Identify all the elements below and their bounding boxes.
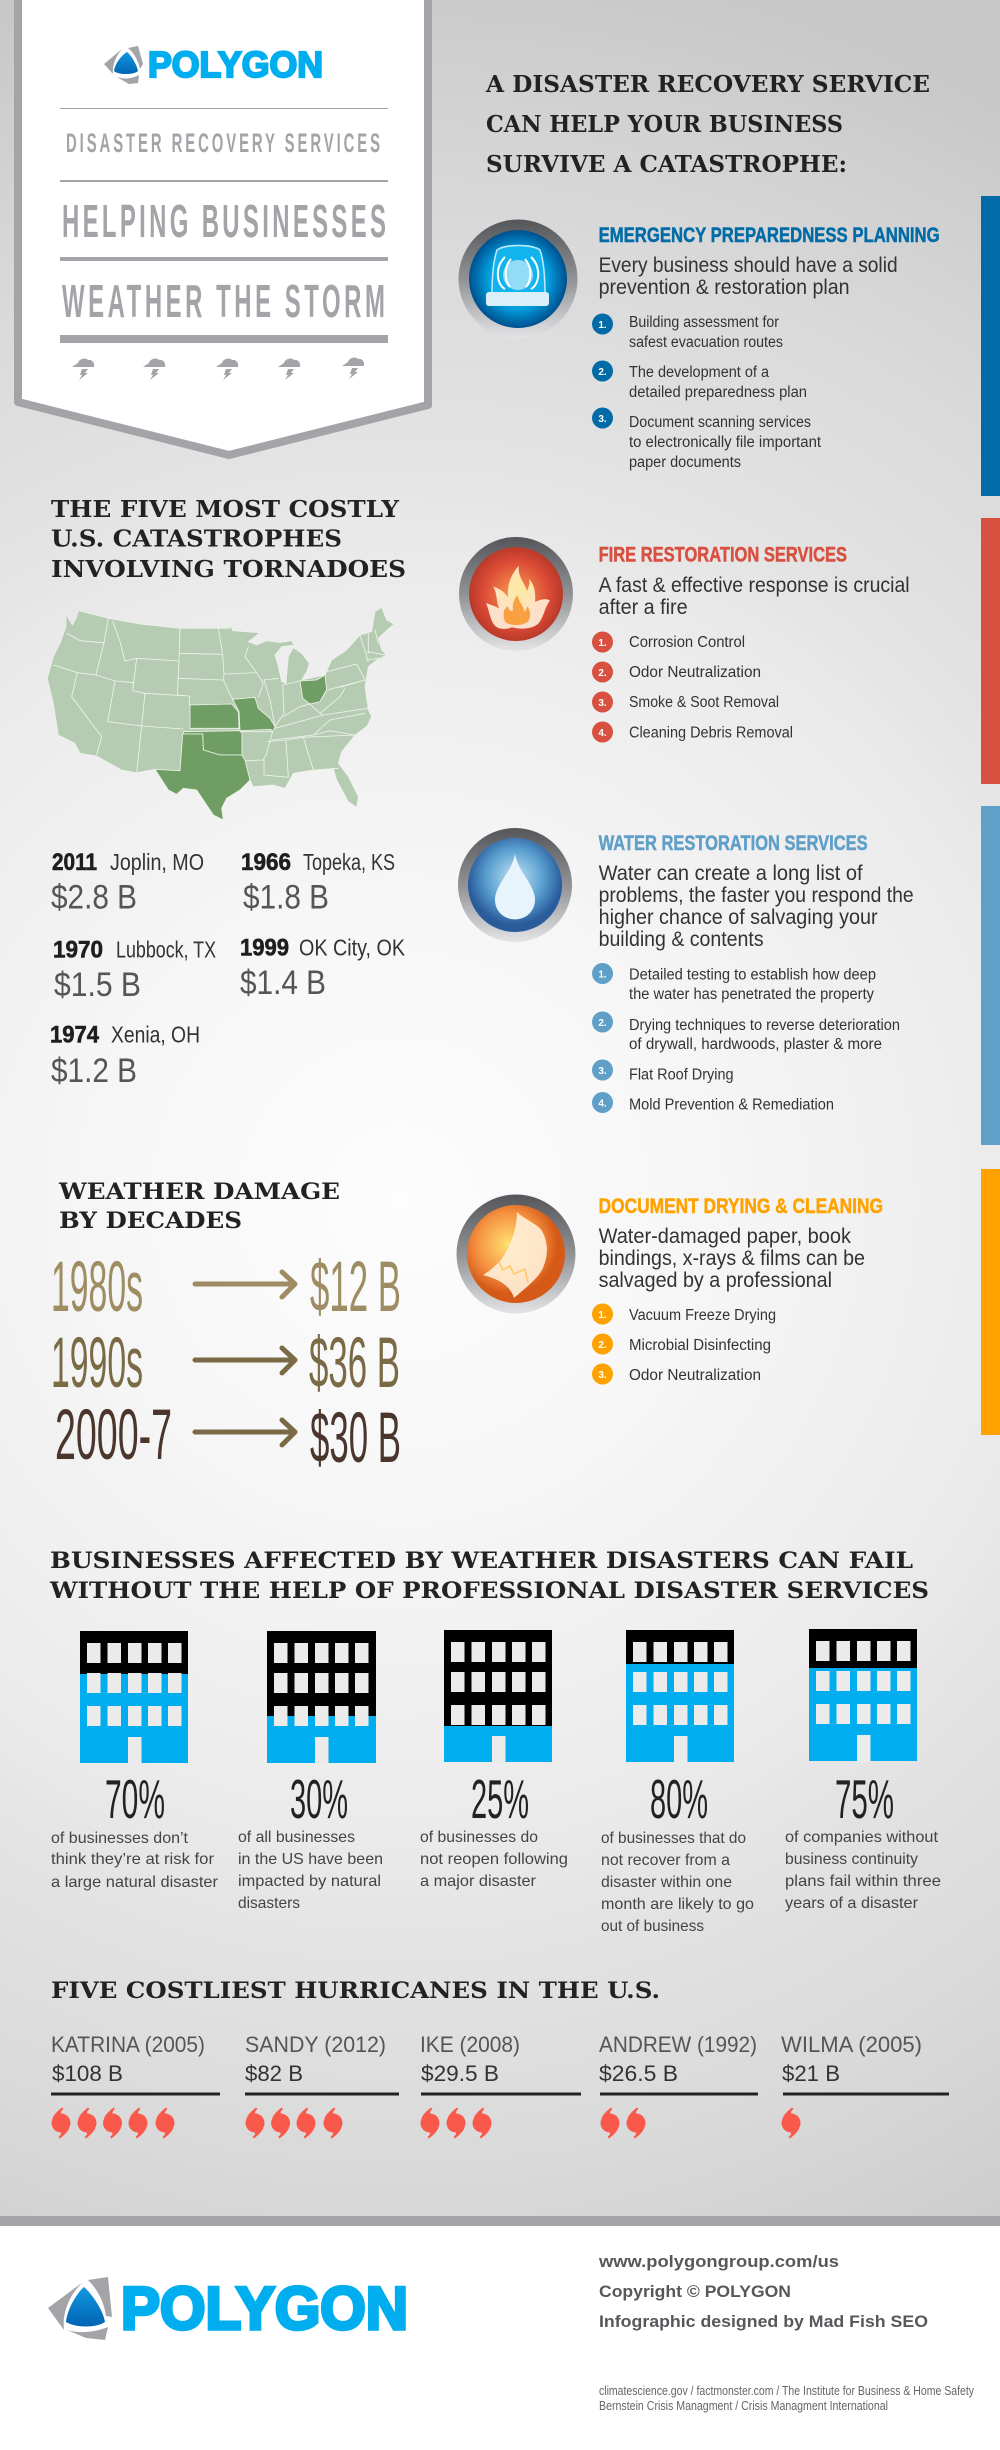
arrow: 1990s bbox=[195, 1348, 295, 1373]
list: 4. bbox=[598, 1098, 607, 1110]
hurricane: Andrew: ANDREW (1992) bbox=[599, 2032, 757, 2057]
list: 1. bbox=[598, 1310, 607, 1321]
stat: 80% bbox=[601, 1630, 754, 1935]
description: month are likely to go bbox=[601, 1896, 754, 1913]
heading: five most costly tornado catastrophes: INVOLVING TORNADOES bbox=[51, 556, 406, 583]
panel: footer bbox=[0, 2216, 1000, 2450]
description bbox=[599, 1225, 865, 1292]
hurricane: Sandy bbox=[245, 2032, 399, 2138]
hurricane: Katrina bbox=[51, 2032, 220, 2138]
chart: damage by decade bbox=[51, 1248, 401, 1478]
description: not reopen following bbox=[420, 1851, 568, 1868]
heading: five costliest hurricanes: FIVE COSTLIEST HURRICANES IN THE U.S. bbox=[51, 1978, 660, 2004]
description: Water can create a long list of bbox=[599, 862, 863, 885]
list: 2. bbox=[598, 1018, 607, 1029]
description bbox=[238, 1829, 383, 1912]
list: Odor Neutralization bbox=[629, 1367, 761, 1384]
list bbox=[592, 632, 793, 742]
description: higher chance of salvaging your bbox=[599, 906, 878, 929]
description: of companies without bbox=[785, 1829, 939, 1846]
stat: Lubbock: 1970 bbox=[53, 936, 103, 964]
row: 1980s: 1980s bbox=[51, 1248, 143, 1327]
list: Mold Prevention & Remediation bbox=[629, 1096, 834, 1114]
description: bindings, x-rays & films can be bbox=[599, 1247, 865, 1270]
heading: disaster recovery service: CAN HELP YOUR BUSINESS bbox=[486, 111, 843, 138]
heading: weather damage by decades bbox=[58, 1179, 340, 1234]
hurricane: Ike bbox=[420, 2032, 581, 2138]
list: 3. bbox=[598, 1066, 607, 1077]
stat: Topeka: $1.8 B bbox=[243, 879, 329, 917]
list: of drywall, hardwoods, plaster & more bbox=[629, 1036, 882, 1053]
stat: 75% bbox=[785, 1629, 941, 1912]
heading: disaster recovery service: A DISASTER RECOVERY SERVICE bbox=[485, 71, 930, 98]
description: not recover from a bbox=[601, 1852, 730, 1869]
stat: 70%: 70% bbox=[105, 1768, 165, 1830]
stat: Joplin: $2.8 B bbox=[51, 879, 137, 917]
heading: weather damage by decades: WEATHER DAMAGE bbox=[58, 1179, 340, 1205]
list: 4. bbox=[598, 728, 607, 739]
hurricane: Wilma: WILMA (2005) bbox=[781, 2032, 922, 2057]
list: 3. bbox=[598, 1370, 607, 1381]
description bbox=[599, 574, 910, 619]
icon: building 80% bbox=[626, 1630, 734, 1763]
list: to electronically file important bbox=[629, 434, 822, 451]
list: Building assessment for bbox=[629, 314, 779, 331]
list: Drying techniques to reverse deterioration bbox=[629, 1017, 900, 1034]
row: 2000-7: 2000-7 bbox=[55, 1396, 172, 1475]
description: of all businesses bbox=[238, 1829, 355, 1846]
heading: businesses affected bbox=[49, 1548, 929, 1604]
list: paper documents bbox=[629, 454, 741, 471]
stat: Xenia: 1974 bbox=[50, 1022, 100, 1048]
heading: disaster recovery service bbox=[485, 71, 930, 178]
description: of businesses do bbox=[420, 1829, 538, 1846]
list: Document scanning services bbox=[629, 414, 811, 431]
list: 2. bbox=[598, 367, 607, 378]
hurricane: Wilma bbox=[781, 2032, 949, 2138]
panel: water restoration bbox=[458, 806, 1000, 1145]
description bbox=[601, 1830, 754, 1935]
description bbox=[420, 1829, 568, 1890]
heading: DOCUMENT DRYING & CLEANING bbox=[599, 1195, 883, 1218]
footer credits bbox=[598, 2252, 928, 2331]
list: 2. bbox=[598, 668, 607, 679]
stat: Joplin: 2011 bbox=[52, 849, 97, 876]
description: business continuity bbox=[785, 1851, 918, 1868]
stat: OK City: OK City, OK bbox=[299, 934, 406, 960]
list: 3. bbox=[598, 698, 607, 709]
icon: building 25% bbox=[444, 1630, 552, 1763]
icons: storm clouds bbox=[72, 358, 364, 380]
description: A fast & effective response is crucial bbox=[599, 574, 910, 597]
text: $12 B bbox=[310, 1248, 401, 1327]
stat: Lubbock: $1.5 B bbox=[54, 966, 141, 1004]
description: prevention & restoration plan bbox=[599, 276, 850, 299]
arrow: 2000-7 bbox=[195, 1420, 295, 1445]
heading: FIRE RESTORATION SERVICES bbox=[599, 544, 847, 566]
list: 1. bbox=[598, 320, 607, 331]
list: the water has penetrated the property bbox=[629, 986, 874, 1003]
icon: flame bbox=[459, 537, 573, 651]
footer credits: www.polygongroup.com/us bbox=[598, 2252, 839, 2271]
list: 3. bbox=[598, 414, 607, 425]
description: problems, the faster you respond the bbox=[599, 884, 914, 907]
stat: Topeka: Topeka, KS bbox=[303, 849, 395, 875]
logo: Polygon large: POLYGON bbox=[121, 2275, 408, 2342]
banner shape bbox=[18, 0, 428, 455]
sources: Bernstein Crisis Managment / Crisis Managment International bbox=[599, 2399, 888, 2413]
hurricane: Andrew: $26.5 B bbox=[599, 2061, 678, 2086]
list: The development of a bbox=[629, 364, 769, 381]
description: of businesses that do bbox=[601, 1830, 746, 1847]
hurricane: Wilma: $21 B bbox=[782, 2061, 840, 2086]
stat: Xenia: Xenia, OH bbox=[111, 1022, 200, 1048]
hurricane: Ike: IKE (2008) bbox=[420, 2032, 520, 2057]
text: $30 B bbox=[310, 1399, 401, 1478]
sources bbox=[599, 2384, 975, 2413]
list: Vacuum Freeze Drying bbox=[629, 1307, 776, 1324]
icon: building 70% bbox=[80, 1631, 188, 1764]
heading: five most costly tornado catastrophes: THE FIVE MOST COSTLY bbox=[51, 496, 400, 523]
hurricane: Ike: $29.5 B bbox=[421, 2061, 499, 2086]
icons: two hurricane symbols bbox=[600, 2108, 646, 2138]
description: disasters bbox=[238, 1895, 300, 1912]
heading: five most costly tornado catastrophes bbox=[51, 496, 406, 583]
stat: 25%: 25% bbox=[471, 1768, 529, 1830]
panel: document drying bbox=[456, 1169, 1000, 1435]
subtitle: DISASTER RECOVERY SERVICES bbox=[66, 127, 380, 158]
heading: disaster recovery service: SURVIVE A CATASTROPHE: bbox=[486, 151, 847, 178]
panel: emergency preparedness bbox=[458, 196, 1000, 496]
description: a major disaster bbox=[420, 1873, 537, 1890]
row: 2000-7 bbox=[55, 1396, 401, 1478]
hurricane: Andrew bbox=[599, 2032, 758, 2138]
description: salvaged by a professional bbox=[599, 1269, 832, 1292]
description: think they’re at risk for bbox=[51, 1851, 215, 1868]
list bbox=[592, 1304, 776, 1384]
stat: OK City bbox=[240, 934, 406, 1002]
heading: WATER RESTORATION SERVICES bbox=[599, 832, 868, 855]
heading: weather damage by decades: BY DECADES bbox=[59, 1208, 242, 1234]
list: 1. bbox=[598, 970, 607, 980]
hurricane: Sandy: SANDY (2012) bbox=[245, 2032, 386, 2057]
description bbox=[51, 1830, 219, 1891]
description: impacted by natural bbox=[238, 1873, 381, 1890]
description: out of business bbox=[601, 1918, 704, 1935]
description bbox=[599, 862, 914, 951]
icons: three hurricane symbols bbox=[420, 2108, 492, 2138]
list: Detailed testing to establish how deep bbox=[629, 966, 876, 984]
list bbox=[592, 963, 900, 1114]
arrow: 1980s bbox=[195, 1272, 295, 1297]
heading: businesses affected: BUSINESSES AFFECTED BY WEATHER DISASTERS CAN FAIL bbox=[50, 1548, 913, 1574]
icon: water drop bbox=[458, 828, 572, 942]
footer credits: Infographic designed by Mad Fish SEO bbox=[599, 2312, 928, 2331]
stat: 70% bbox=[51, 1631, 219, 1891]
list bbox=[592, 314, 822, 471]
description: disaster within one bbox=[601, 1874, 732, 1891]
hurricane: Sandy: $82 B bbox=[245, 2061, 303, 2086]
list: Smoke & Soot Removal bbox=[629, 694, 779, 711]
list: detailed preparedness plan bbox=[629, 384, 807, 401]
icon: siren bbox=[458, 220, 578, 338]
list: 2. bbox=[598, 1340, 607, 1351]
description bbox=[785, 1829, 941, 1912]
stat: 75%: 75% bbox=[835, 1768, 894, 1830]
description: years of a disaster bbox=[785, 1895, 919, 1912]
list: Cleaning Debris Removal bbox=[629, 724, 793, 742]
list: Corrosion Control bbox=[629, 634, 745, 651]
stat: OK City: $1.4 B bbox=[240, 964, 326, 1002]
row: 1980s bbox=[51, 1248, 401, 1327]
hurricane: Katrina: KATRINA (2005) bbox=[51, 2032, 205, 2057]
list: 1. bbox=[598, 638, 607, 649]
stat: 25% bbox=[420, 1630, 568, 1890]
description: plans fail within three bbox=[785, 1873, 941, 1890]
panel: tornado city stats bbox=[50, 849, 406, 1090]
icons: four hurricane symbols bbox=[246, 2108, 342, 2138]
description: a large natural disaster bbox=[51, 1874, 219, 1891]
row: 1990s bbox=[51, 1324, 400, 1403]
stat: Lubbock bbox=[53, 936, 216, 1004]
list: Odor Neutralization bbox=[629, 664, 761, 681]
description: after a fire bbox=[599, 596, 688, 619]
stat: Topeka: 1966 bbox=[241, 849, 291, 876]
stat: Joplin bbox=[51, 849, 204, 917]
icons: five hurricane symbols bbox=[52, 2108, 174, 2138]
description bbox=[599, 254, 898, 299]
hurricane: Katrina: $108 B bbox=[52, 2061, 123, 2086]
description: Every business should have a solid bbox=[599, 254, 898, 277]
title line 2: WEATHER THE STORM bbox=[62, 276, 385, 327]
row: 1990s: 1990s bbox=[51, 1324, 143, 1403]
stat: Xenia bbox=[50, 1022, 200, 1090]
description: Water-damaged paper, book bbox=[599, 1225, 851, 1248]
stat: Lubbock: Lubbock, TX bbox=[116, 936, 216, 962]
stat: 30%: 30% bbox=[290, 1768, 348, 1830]
stat: 80%: 80% bbox=[650, 1768, 708, 1830]
stat: 30% bbox=[238, 1631, 383, 1912]
stat: Xenia: $1.2 B bbox=[51, 1052, 137, 1090]
heading: businesses affected: WITHOUT THE HELP OF PROFESSIONAL DISASTER SERVICES bbox=[49, 1578, 929, 1604]
list: Flat Roof Drying bbox=[629, 1066, 734, 1084]
highlighted states: TX, OK, KS, MO, OH bbox=[155, 675, 327, 820]
panel: fire restoration bbox=[459, 518, 1000, 784]
heading: five most costly tornado catastrophes: U.S. CATASTROPHES bbox=[51, 526, 342, 552]
icon: building 30% bbox=[267, 1631, 376, 1764]
stat: Joplin: Joplin, MO bbox=[110, 849, 204, 875]
stat: Topeka bbox=[241, 849, 395, 917]
stat: OK City: 1999 bbox=[240, 934, 289, 962]
description: building & contents bbox=[599, 928, 764, 951]
logo: Polygon small: POLYGON bbox=[148, 44, 323, 85]
icon: one hurricane symbol bbox=[782, 2108, 800, 2138]
description: in the US have been bbox=[238, 1851, 383, 1868]
title line 1: HELPING BUSINESSES bbox=[62, 196, 386, 247]
list: Microbial Disinfecting bbox=[629, 1337, 771, 1354]
list: safest evacuation routes bbox=[629, 334, 783, 351]
text: $36 B bbox=[309, 1324, 400, 1403]
description: of businesses don’t bbox=[51, 1830, 189, 1847]
panel: title banner bbox=[18, 0, 428, 455]
footer credits: Copyright © POLYGON bbox=[599, 2282, 791, 2301]
icon: building 75% bbox=[809, 1629, 917, 1762]
map: United States with highlighted states bbox=[47, 607, 394, 820]
icon: damaged paper bbox=[456, 1194, 576, 1314]
